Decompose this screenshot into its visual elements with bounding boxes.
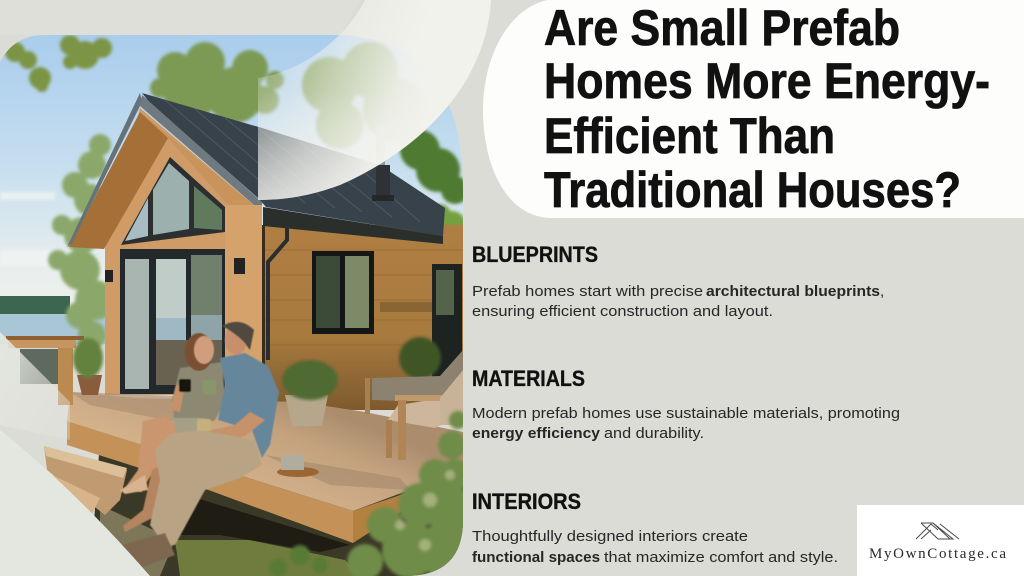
heading: interiors: INTERIORS bbox=[472, 489, 581, 514]
shrub by door bbox=[399, 337, 441, 379]
body: materials: Modern prefab homes use sustainable materials, promoting bbox=[472, 405, 900, 422]
heading: blueprints: BLUEPRINTS bbox=[472, 242, 598, 267]
body: blueprints: architectural blueprints bbox=[706, 283, 880, 300]
logo wordmark: MyOwnCottage.ca bbox=[869, 546, 1006, 562]
right door bbox=[432, 264, 462, 384]
translucent corner overlay bbox=[0, 332, 70, 440]
bottom-left light shape bbox=[0, 430, 150, 576]
left tree bbox=[48, 134, 115, 349]
body: blueprints: ensuring efficient construction and layout. bbox=[472, 303, 773, 320]
title: Efficient Than bbox=[544, 108, 835, 164]
ground bbox=[94, 455, 463, 576]
title bbox=[544, 0, 990, 218]
woman head bbox=[185, 333, 214, 371]
couple sitting on deck bbox=[120, 322, 279, 568]
deck floor bbox=[67, 392, 463, 511]
heading: materials: MATERIALS bbox=[472, 366, 585, 391]
woman body bbox=[172, 362, 225, 422]
background trees bbox=[5, 35, 469, 349]
downpipe bbox=[268, 222, 287, 360]
clouds bbox=[0, 192, 55, 266]
foreground foliage bbox=[269, 411, 474, 576]
body: blueprints: Prefab homes start with precise bbox=[472, 283, 703, 300]
house walls bbox=[105, 108, 463, 410]
adirondack chairs bbox=[365, 350, 463, 460]
soffit of gable bbox=[69, 112, 168, 249]
title: Are Small Prefab bbox=[544, 0, 900, 56]
woman shoe bbox=[120, 475, 148, 494]
cottage window bbox=[312, 251, 374, 334]
man pants bbox=[150, 430, 262, 545]
body: interiors bbox=[472, 528, 838, 566]
mug dark bbox=[179, 379, 191, 392]
woman arm bbox=[171, 385, 185, 412]
man head bbox=[222, 322, 254, 355]
section: interiors bbox=[472, 489, 838, 566]
woman legs bbox=[126, 416, 177, 493]
title: Traditional Houses? bbox=[544, 162, 961, 218]
translucent white blob bbox=[258, 0, 491, 200]
body: materials: energy efficiency bbox=[472, 425, 601, 442]
deck fascia bbox=[67, 421, 353, 543]
body: interiors: functional spaces bbox=[472, 549, 600, 566]
section: blueprints bbox=[472, 242, 884, 320]
man arm bbox=[208, 412, 266, 437]
side table with candle bbox=[277, 455, 319, 477]
glass sliding doors bbox=[120, 249, 225, 394]
trim post bbox=[228, 205, 262, 232]
body: blueprints bbox=[472, 283, 884, 320]
title panel bbox=[483, 0, 1024, 218]
top-left branch bbox=[5, 35, 112, 92]
gable window bbox=[121, 157, 225, 245]
right tree behind roof bbox=[302, 42, 427, 149]
potted plant centre bbox=[282, 360, 338, 426]
man shirt bbox=[218, 353, 279, 458]
man boots bbox=[122, 533, 175, 568]
body: interiors: that maximize comfort and style. bbox=[604, 549, 838, 566]
mug tan bbox=[197, 419, 211, 431]
wall lanterns bbox=[105, 258, 245, 282]
body: interiors: Thoughtfully designed interiors create bbox=[472, 528, 748, 545]
shadow on deck bbox=[73, 392, 174, 422]
potted plant left bbox=[73, 338, 103, 395]
stairs bbox=[44, 446, 127, 515]
mug green bbox=[203, 380, 216, 395]
photo: cottage with couple on deck bbox=[0, 35, 474, 576]
chimney flue bbox=[372, 161, 394, 201]
metal roof bbox=[67, 93, 445, 247]
body: materials bbox=[472, 405, 900, 442]
logo box bbox=[857, 505, 1024, 576]
body: blueprints: , bbox=[880, 283, 884, 300]
sky bbox=[0, 35, 463, 325]
icon: mountain roofs bbox=[916, 523, 959, 539]
distant lake and treeline bbox=[0, 296, 110, 344]
section: materials bbox=[472, 366, 900, 442]
top-centre tree bbox=[150, 42, 284, 123]
deck railing bbox=[6, 336, 84, 405]
body: materials: and durability. bbox=[604, 425, 704, 442]
top-left pale band bbox=[0, 0, 360, 35]
